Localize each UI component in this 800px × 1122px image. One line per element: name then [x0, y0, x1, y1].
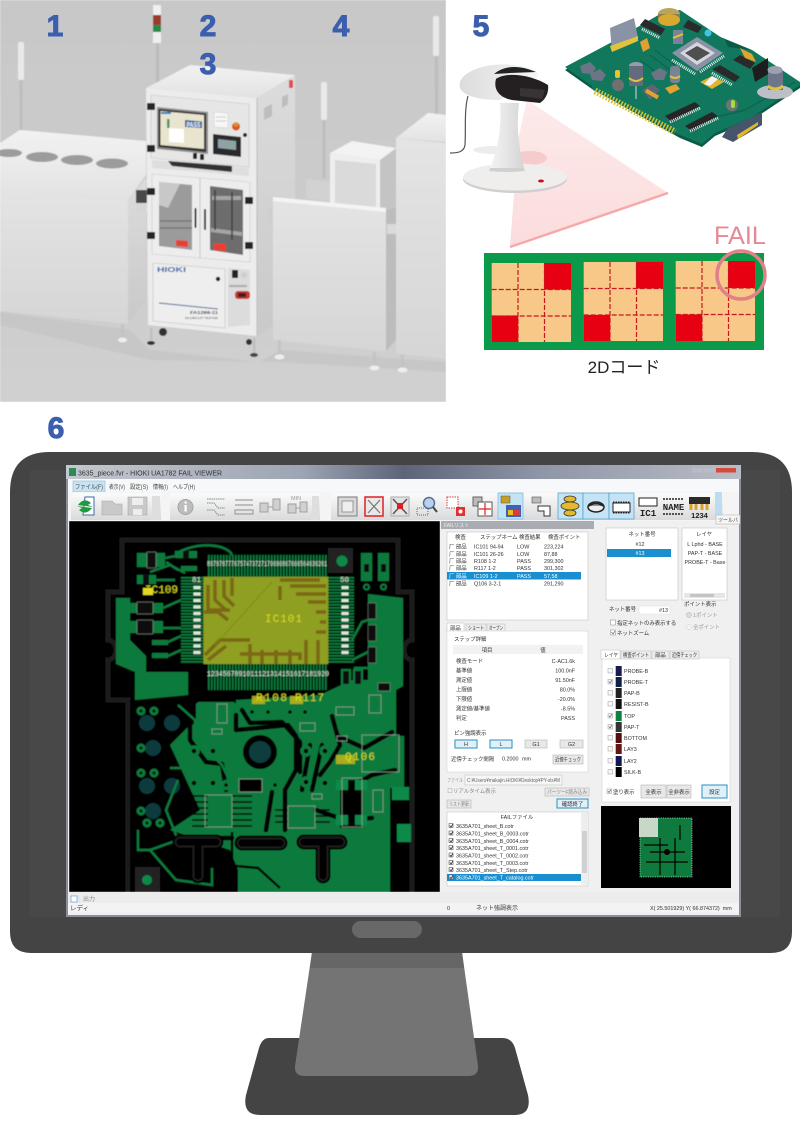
- inspection result table: Q106 3-2-1: [474, 582, 501, 588]
- inspection result table: 厂 部品: [449, 580, 467, 588]
- layer name list: レイヤ: [696, 532, 712, 538]
- inspection result table: 291,290: [544, 582, 564, 588]
- file path controls: C:¥Users¥makajin.HIOKI¥Desktop¥PY-xls¥M: [467, 778, 560, 784]
- icon: 1234 pins: 1234: [691, 511, 709, 520]
- inspection result table: 87,88: [544, 552, 558, 558]
- net number list: #12: [636, 542, 644, 548]
- machine: right conveyor unit: [267, 82, 397, 370]
- step detail panel: 近傍チェック: [555, 756, 581, 764]
- inspection result table: LOW: [517, 544, 530, 550]
- inspection result table: IC109 1-2: [474, 574, 498, 580]
- status bars: レディ: [70, 903, 89, 912]
- layer tabs and list: 近傍チェック: [672, 651, 697, 659]
- layer name list: PROBE-T - Base: [685, 560, 725, 566]
- machine lower panel with logo: IN-CIRCUIT TESTER: [185, 316, 218, 320]
- FAIL file list: FAILファイル: [501, 814, 534, 821]
- file path controls: リスト更新: [449, 800, 469, 808]
- icon: info: [178, 500, 193, 514]
- illustration: printed circuit board: [565, 8, 800, 147]
- vias on copper: [190, 708, 329, 788]
- inspection result table: IC101 94-94: [474, 544, 504, 550]
- layer tabs and list: [601, 650, 730, 802]
- layer tabs and list: PAP-B: [624, 691, 640, 697]
- layer name list: [682, 528, 727, 600]
- icon: grid with red cross: [473, 497, 492, 516]
- icon: signal lines: [207, 499, 225, 515]
- board outline: [108, 540, 412, 892]
- step detail panel: 0.2000: [502, 756, 518, 762]
- net controls: ネット番号: [609, 606, 637, 613]
- tabs: part / short / open: [447, 623, 505, 632]
- pin numbers: 50: [340, 577, 350, 585]
- inspection result table: 299,300: [544, 559, 564, 565]
- pin numbers: 81: [192, 577, 202, 585]
- yellow highlighted parts: [252, 696, 355, 764]
- inspection result table: PASS: [517, 566, 531, 572]
- step detail panel: 近傍チェック間隔: [451, 755, 495, 763]
- lower left pads: [135, 705, 234, 892]
- tabs: part / short / open: ショート: [468, 626, 484, 632]
- processor chip: [672, 37, 724, 74]
- inspection result table: [447, 532, 588, 620]
- icon: capacitor layer: [558, 493, 583, 519]
- icon: NAME label: NAME: [663, 503, 685, 513]
- inspection result table: PASS: [517, 559, 531, 565]
- menu bar: [68, 479, 739, 492]
- T shaped silk marks: [180, 842, 340, 876]
- net controls: 全ポイント: [693, 623, 720, 631]
- status bars: 出力: [83, 895, 95, 903]
- layer tabs and list: 塗り表示: [613, 788, 635, 796]
- IC lead traces: [208, 555, 327, 577]
- FAIL label: FAIL: [714, 222, 766, 250]
- panel: FAIL list: FAILリスト: [444, 523, 469, 529]
- file path controls: [447, 775, 589, 808]
- number 2: 2: [200, 10, 216, 43]
- layer tabs and list: SILK-B: [624, 770, 641, 776]
- step detail panel: 値: [540, 646, 546, 654]
- inspection result table: 厂 部品: [449, 544, 467, 550]
- layer tabs and list: LAY2: [624, 759, 637, 765]
- 2D code sheet: [484, 253, 764, 350]
- net number list: [606, 528, 678, 600]
- inspection result table: LOW: [517, 552, 530, 558]
- net controls: ネットズーム: [617, 629, 650, 637]
- FAIL file list: 3635A701_sheet_T_0003.cotr: [456, 861, 529, 867]
- step detail panel: 測定値/基準値: [456, 704, 490, 712]
- icon: chip outline layer: [609, 493, 634, 519]
- layer tabs and list: LAY3: [624, 747, 637, 753]
- monitor base: [245, 1038, 529, 1115]
- icon: grouped boxes: [532, 497, 550, 516]
- icon: probes: [260, 499, 280, 512]
- net controls: 指定ネットのみ表示する: [617, 619, 676, 627]
- icon: probes minimum: [288, 496, 307, 513]
- layer tabs and list: レイヤ: [604, 653, 618, 659]
- right components: [342, 603, 390, 691]
- inspection result table: ステップネーム: [480, 534, 518, 541]
- step detail panel: -8.5%: [561, 706, 575, 712]
- layer tabs and list: PROBE-B: [624, 669, 649, 675]
- inspection result table: PASS: [517, 574, 531, 580]
- step detail panel: [447, 631, 588, 772]
- bottom connector: [722, 112, 762, 142]
- icon: highlighted list: [498, 493, 523, 519]
- inspection result table: 223,224: [544, 544, 564, 550]
- status bars: [68, 892, 739, 912]
- layer tabs and list: PROBE-T: [624, 680, 649, 686]
- label IC109: IC109: [145, 585, 178, 597]
- tabs: part / short / open: オープン: [489, 625, 503, 632]
- step detail panel: 80.0%: [560, 688, 575, 694]
- icon: open folder: [102, 501, 122, 515]
- pin numbers: 1234567891011121314151617181920: [207, 671, 329, 679]
- machine: far right unit: [396, 16, 446, 372]
- status bars: X( 25.501929) Y( 66.874372) mm: [650, 906, 732, 912]
- layer tabs and list: 部品: [655, 652, 666, 659]
- status bars: 0: [447, 906, 450, 912]
- FAIL file list: 3635A701_sheet_B.cotr: [456, 824, 514, 830]
- icon: fit red: [365, 497, 383, 516]
- layer tabs and list: 全非表示: [668, 788, 690, 796]
- gold edge connector: [595, 91, 675, 132]
- machine lower panel with logo: HIOKI: [157, 265, 186, 274]
- layer tabs and list: 検査ポイント: [623, 651, 649, 659]
- code panel 3: [676, 261, 755, 341]
- code panel 2: [584, 262, 663, 341]
- inspection result table: 57,58: [544, 574, 558, 580]
- FAIL highlight circle: [717, 251, 765, 299]
- label R117: R117: [295, 693, 324, 705]
- monitor logo plate: [352, 921, 422, 938]
- inspection result table: 検査結果: [519, 533, 541, 541]
- net controls: ポイント表示: [684, 600, 717, 608]
- pin numbers: [192, 561, 350, 679]
- step detail panel: 100.0nF: [555, 668, 576, 674]
- step detail panel: -20.0%: [558, 697, 575, 703]
- FAIL file list: [447, 812, 588, 886]
- number 1: 1: [47, 10, 63, 43]
- large mounting hole: [243, 735, 277, 769]
- layer tabs and list: TOP: [624, 714, 635, 720]
- inspection result table: 厂 部品: [449, 573, 467, 580]
- icon: barcode scanner on stand: [450, 64, 567, 193]
- label R108: R108: [256, 693, 287, 705]
- step detail panel: 上限値: [456, 686, 473, 694]
- icon: 1234 pins: [689, 497, 710, 520]
- net controls: [609, 600, 720, 637]
- inspection result table: 301,302: [544, 566, 564, 572]
- layer tabs and list: 設定: [709, 789, 720, 796]
- menu bar: 表示(V): [109, 483, 125, 491]
- menu bar: 情報(I): [153, 483, 168, 491]
- icon: width gauge: [235, 500, 253, 514]
- upper components: [130, 545, 389, 658]
- step detail panel: L: [500, 742, 502, 748]
- icon: save disk: [128, 497, 147, 515]
- status bars: ネット強調表示: [476, 904, 518, 912]
- copper areas: [116, 594, 404, 892]
- inspection result table: R117 1-2: [474, 566, 496, 572]
- step detail panel: ピン強調表示: [454, 729, 487, 737]
- number 6: 6: [48, 412, 64, 445]
- IC101 highlighted footprint: [203, 577, 328, 664]
- file path controls: パーツーF読み込み: [547, 788, 588, 796]
- step detail panel: 測定値: [456, 676, 473, 684]
- step detail panel: mm: [522, 756, 531, 762]
- file path controls: リアルタイム表示: [453, 787, 497, 795]
- photo: inspection line background: [0, 0, 446, 402]
- FAIL file list: 3635A701_sheet_T_0001.cotr: [456, 846, 529, 852]
- inspection result table: 検査: [455, 533, 466, 541]
- component outlines: [205, 695, 399, 828]
- icon: oval layer: [583, 493, 609, 519]
- inspection result table: IC101 26-26: [474, 552, 504, 558]
- step detail panel: PASS: [561, 716, 575, 722]
- step detail panel: G2: [568, 742, 575, 748]
- code panel 1: [492, 263, 571, 342]
- layer tabs and list: RESIST-B: [624, 702, 649, 708]
- inspection result table: R108 1-2: [474, 559, 496, 565]
- number 3: 3: [200, 48, 216, 81]
- menu bar: 設定(S): [130, 483, 148, 491]
- step detail panel: G1: [532, 742, 540, 748]
- light cone from scanner: [510, 100, 668, 247]
- icon: IC1 label: [639, 498, 657, 519]
- toolbar: [68, 492, 739, 521]
- icon: NAME label: [663, 499, 685, 514]
- menu bar: ファイル(F): [75, 484, 103, 491]
- monitor stand: [245, 952, 529, 1115]
- step detail panel: C-AC1.6k: [552, 659, 575, 665]
- icon: view frame: [338, 497, 357, 516]
- step detail panel: 91.50nF: [555, 678, 576, 684]
- icon: touch screen showing PASS: [157, 107, 208, 160]
- window title bar: 3635_piece.fvr - HIOKI UA1782 FAIL VIEWER: [78, 470, 222, 478]
- step detail panel: 項目: [482, 647, 492, 654]
- menu bar: ヘルプ(H): [173, 484, 195, 491]
- FAIL file list: 3635A701_sheet_T_catalog.cotr: [456, 876, 534, 882]
- machine lower panel with logo: [153, 263, 250, 328]
- inspection result table: 検査ポイント: [548, 533, 580, 541]
- number 4: 4: [333, 10, 350, 43]
- layer tabs and list: 全表示: [645, 788, 662, 796]
- inspection result table: 厂 部品: [449, 558, 467, 565]
- net controls: #13: [659, 608, 668, 614]
- icon: zoom to red point: [391, 497, 409, 516]
- monitor body: [10, 452, 792, 953]
- icon: reload file: [77, 497, 94, 515]
- panel: net and layer controls: [601, 528, 731, 888]
- machine: FA1266-11 in-circuit tester: [146, 5, 295, 357]
- label IC101: IC101: [265, 614, 302, 626]
- monitor neck: [295, 952, 478, 1076]
- thumbnail overview: [601, 806, 731, 888]
- step detail panel: 判定: [456, 714, 467, 722]
- pin numbers: 8079787776757473727170696867666564636261: [207, 561, 327, 569]
- black routing cut through copper: [178, 705, 395, 838]
- FAIL file list: 3635A701_sheet_B_0004.cotr: [456, 839, 529, 845]
- net controls: 1ポイント: [693, 611, 718, 619]
- icon: touch screen showing PASS: PASS: [186, 122, 201, 129]
- label Q106: Q106: [345, 752, 375, 764]
- icon: IC1 label: IC1: [640, 509, 657, 519]
- machine: left conveyor unit: [0, 42, 148, 342]
- icon: probes minimum: MIN: [291, 496, 301, 502]
- icon: magnifier: [417, 498, 437, 515]
- file path controls: ファイル: [447, 777, 463, 784]
- step detail panel: 基準値: [456, 666, 473, 674]
- 2D code caption: 2Dコード: [588, 358, 660, 377]
- step detail panel: 検査モード: [456, 657, 483, 665]
- tabs: part / short / open: 部品: [450, 625, 461, 632]
- layer name list: PAP-T - BASE: [688, 551, 723, 557]
- icon: red dotted target: [447, 497, 465, 516]
- file path controls: 確認終了: [562, 800, 583, 808]
- step detail panel: H: [464, 742, 468, 748]
- number 5: 5: [473, 10, 489, 43]
- FAIL file list: 3635A701_sheet_T_0002.cotr: [456, 854, 529, 860]
- net number list: ネット番号: [629, 531, 656, 538]
- layer name list: L Lphd - BASE: [687, 542, 723, 548]
- net number list: #13: [636, 551, 644, 557]
- hinges: [147, 103, 253, 249]
- step detail panel: 下限値: [456, 695, 473, 703]
- machine doors with windows: [152, 174, 250, 262]
- panel: FAIL list: [441, 521, 594, 891]
- tooltip: [716, 515, 740, 524]
- step detail panel: ステップ詳細: [454, 635, 486, 643]
- layer tabs and list: PAP-T: [624, 725, 640, 731]
- square pads: [336, 780, 411, 842]
- FAIL file list: 3635A701_sheet_T_Step.cotr: [456, 868, 528, 874]
- inspection result table: 厂 部品: [449, 565, 467, 572]
- layer tabs and list: BOTTOM: [624, 736, 647, 742]
- inspection result table: 厂 部品: [449, 551, 467, 558]
- window title bar: [66, 465, 741, 479]
- application window: FAIL viewer: [66, 465, 741, 917]
- capacitors and components: [580, 8, 793, 131]
- tooltip: ツールバ: [718, 517, 738, 524]
- machine lower panel with logo: FA1266-11: [190, 310, 219, 315]
- PCB layout view: [69, 521, 440, 892]
- comb traces: [192, 796, 330, 826]
- FAIL file list: 3635A701_sheet_B_0003.cotr: [456, 832, 529, 838]
